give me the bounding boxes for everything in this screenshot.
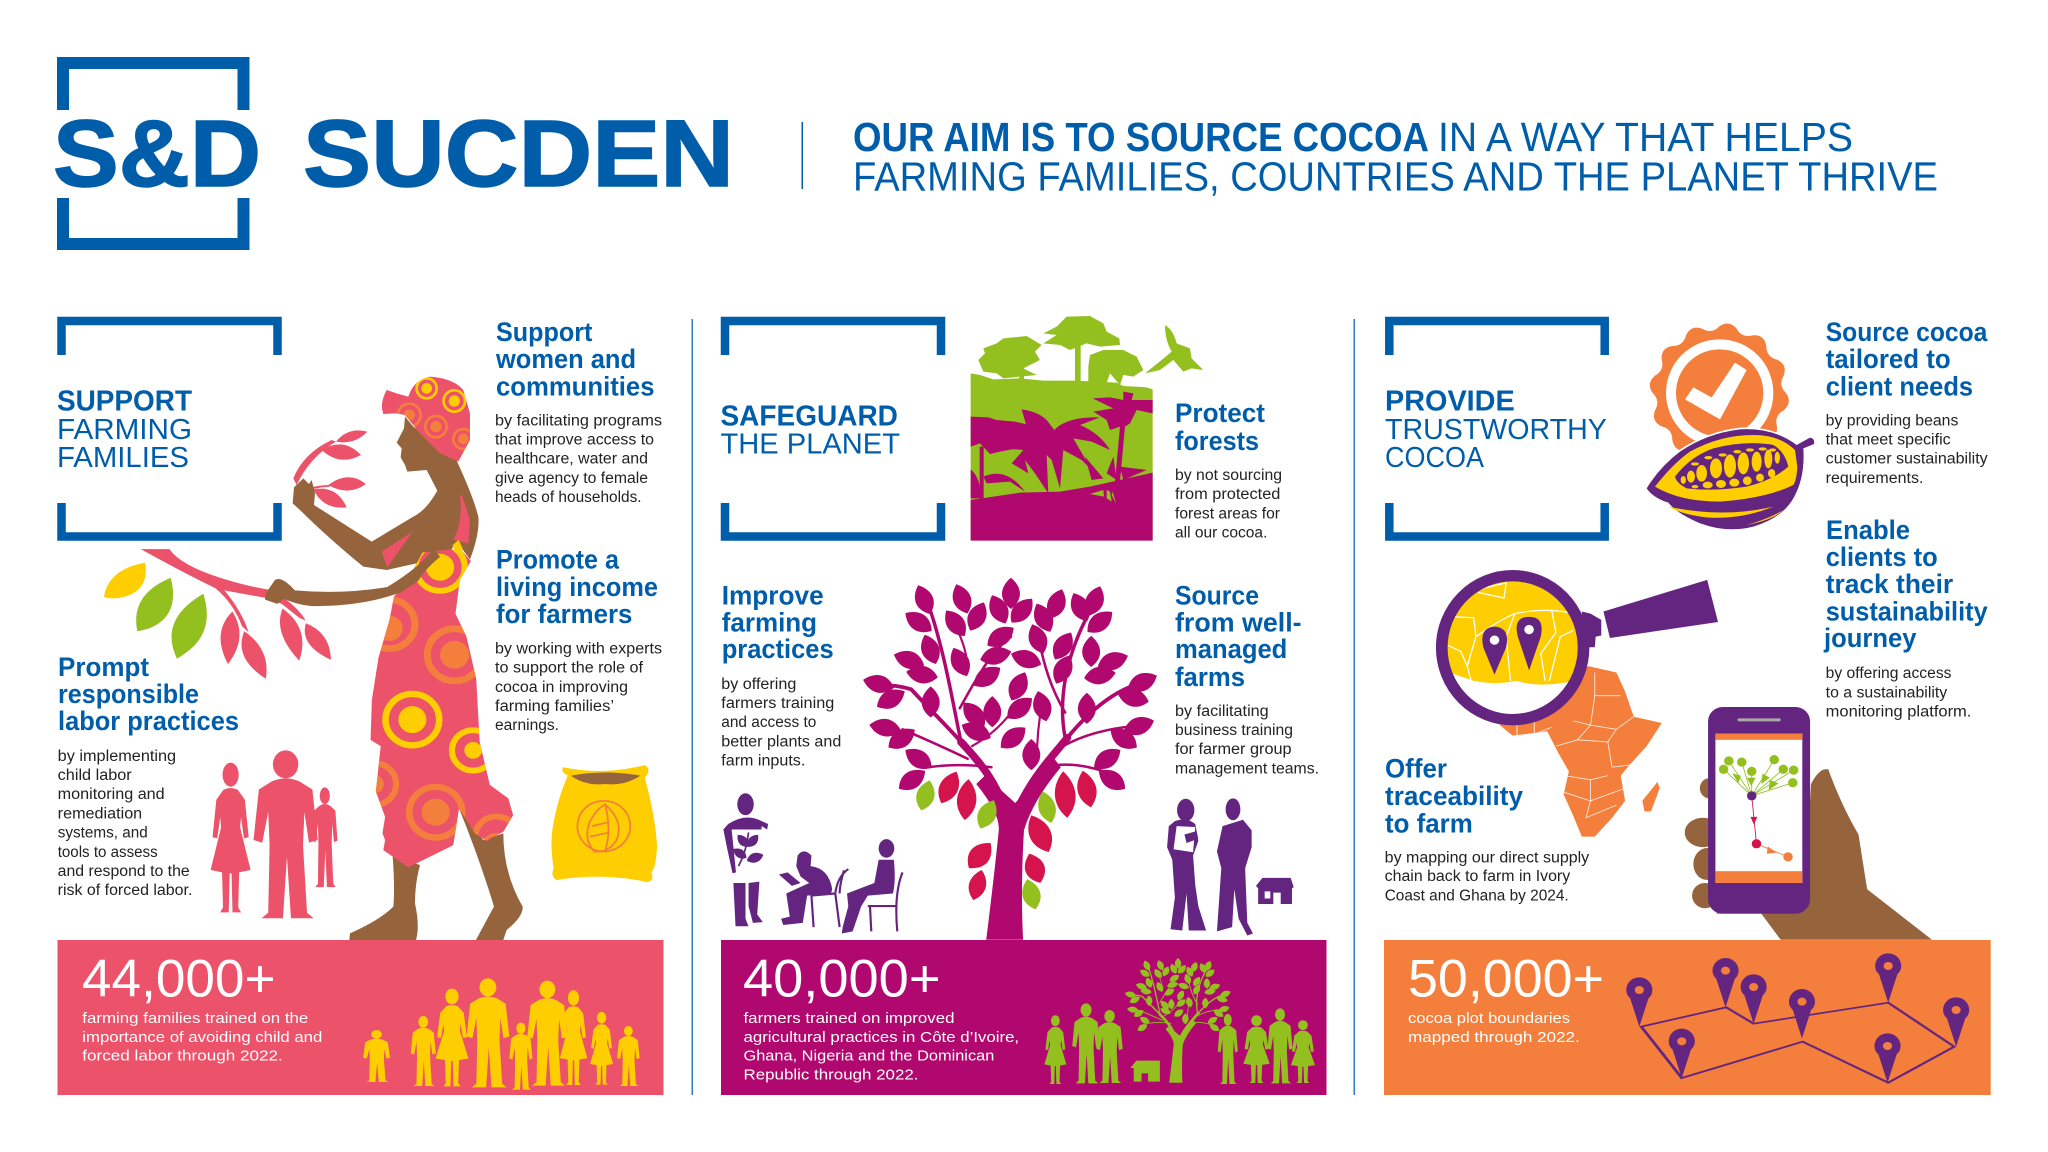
stat description: Republic through 2022. bbox=[744, 1067, 918, 1084]
front arm bbox=[265, 548, 440, 606]
text: prompt responsible labor practices: responsible bbox=[58, 679, 199, 709]
map of Africa bbox=[1500, 666, 1662, 837]
stat number: 40,000+ bbox=[743, 950, 940, 1009]
headwrap bbox=[382, 377, 473, 462]
panel: safeguard the planet bbox=[720, 316, 1326, 1095]
text: offer traceability to farm: traceability bbox=[1385, 781, 1523, 811]
header: S&D Sucden logo bbox=[53, 63, 734, 244]
text: source from well-managed farms: by facilitating bbox=[1175, 703, 1269, 720]
red and green fruit leaves bbox=[933, 768, 1100, 902]
stat description bbox=[744, 1010, 1019, 1084]
text: source cocoa tailored to client needs: by providing beans bbox=[1826, 412, 1959, 429]
section title: FAMILIES bbox=[57, 442, 189, 474]
seated farmer reading bbox=[779, 851, 848, 927]
text: source cocoa tailored to client needs bbox=[1826, 317, 1988, 487]
head, torso and raised arm bbox=[293, 417, 479, 570]
stat description: agricultural practices in Côte d’Ivoire, bbox=[744, 1029, 1019, 1046]
branch with leaves bbox=[104, 549, 331, 679]
section title: SAFEGUARD bbox=[720, 400, 898, 432]
text: promote a living income: by working with experts bbox=[495, 640, 662, 658]
text: prompt responsible labor practices: risk of forced labor. bbox=[58, 882, 192, 899]
phone bbox=[1708, 707, 1810, 914]
stat number: 44,000+ bbox=[82, 950, 276, 1009]
stat number: 50,000+ bbox=[1408, 950, 1604, 1009]
text: source from well-managed farms: Source bbox=[1175, 581, 1259, 611]
section title bbox=[1385, 386, 1607, 474]
text: source cocoa tailored to client needs: that meet specific bbox=[1826, 431, 1951, 448]
small branch in raised hand bbox=[293, 430, 367, 508]
section title: SUPPORT bbox=[57, 386, 192, 418]
farmer holding plant bbox=[723, 793, 768, 926]
text: enable clients to track their sustainability journey: Enable bbox=[1826, 515, 1910, 545]
text: prompt responsible labor practices: Prompt bbox=[58, 652, 149, 682]
stat description: farmers trained on improved bbox=[744, 1010, 954, 1027]
text: promote a living income: for farmers bbox=[496, 599, 632, 629]
text: promote a living income: Promote a bbox=[496, 544, 619, 574]
text: prompt responsible labor practices: and respond to the bbox=[58, 863, 190, 880]
text: promote a living income bbox=[495, 544, 662, 734]
tagline: FARMING FAMILIES, COUNTRIES AND THE PLANET THRIVE bbox=[853, 154, 1938, 200]
header divider bbox=[802, 122, 803, 189]
standing woman with clipboard bbox=[1167, 799, 1206, 931]
icon: house bbox=[1256, 878, 1294, 904]
quality badge bbox=[1650, 323, 1789, 462]
logo wordmark S&D: S&D bbox=[53, 101, 261, 207]
text: improve farming practices: better plants and bbox=[721, 734, 841, 750]
text: improve farming practices: Improve bbox=[722, 581, 824, 611]
logo bracket bbox=[63, 63, 244, 244]
text: prompt responsible labor practices: by implementing bbox=[58, 748, 176, 765]
illustration: woman with branches bbox=[104, 377, 523, 940]
text: support women and communities bbox=[495, 317, 662, 506]
tagline bbox=[853, 114, 1938, 200]
text: offer traceability to farm: by mapping our direct supply bbox=[1385, 849, 1589, 866]
illustration: quality badge and cocoa pod bbox=[1647, 323, 1814, 529]
text: prompt responsible labor practices: child labor bbox=[58, 767, 132, 784]
stat band: 44,000+ bbox=[58, 940, 664, 1095]
text: source cocoa tailored to client needs: client needs bbox=[1826, 372, 1973, 402]
illustration: family silhouettes bbox=[211, 750, 337, 918]
text: source from well-managed farms: for farmer group bbox=[1175, 741, 1292, 758]
text: enable clients to track their sustainability journey: to a sustainability bbox=[1826, 684, 1947, 701]
section bracket bbox=[1389, 321, 1605, 536]
text: source cocoa tailored to client needs: requirements. bbox=[1826, 470, 1923, 487]
text: enable clients to track their sustainability journey: track their bbox=[1826, 569, 1953, 599]
text: enable clients to track their sustainability journey: sustainability bbox=[1826, 596, 1988, 626]
text: source from well-managed farms: business training bbox=[1175, 722, 1293, 739]
section title: THE PLANET bbox=[720, 429, 900, 461]
text: prompt responsible labor practices: systems, and bbox=[58, 824, 148, 842]
text: enable clients to track their sustainability journey: journey bbox=[1823, 623, 1917, 653]
text: improve farming practices bbox=[721, 581, 841, 770]
text: improve farming practices: farming bbox=[722, 608, 817, 638]
icon: mapped plot with pins bbox=[1626, 953, 1969, 1083]
magnifier lens bbox=[1442, 576, 1601, 720]
section title bbox=[720, 400, 900, 461]
standing man bbox=[1217, 798, 1253, 936]
text: support women and communities: that improve access to bbox=[495, 431, 654, 448]
section title bbox=[57, 386, 192, 474]
text: promote a living income: cocoa in improving bbox=[495, 679, 628, 696]
text: support women and communities: by facilitating programs bbox=[495, 412, 662, 429]
text: source cocoa tailored to client needs: tailored to bbox=[1826, 344, 1951, 374]
panel: support farming families bbox=[57, 317, 664, 1095]
text: source from well-managed farms: from well- bbox=[1175, 608, 1302, 638]
tagline: IN A WAY THAT HELPS bbox=[1438, 114, 1853, 160]
section title: FARMING bbox=[57, 414, 192, 446]
icon: green tree bbox=[1124, 958, 1232, 1083]
logo wordmark SUCDEN: SUCDEN bbox=[303, 101, 734, 207]
stat description: forced labor through 2022. bbox=[82, 1048, 283, 1065]
text: prompt responsible labor practices: labor practices bbox=[58, 706, 239, 736]
illustration: hand holding phone bbox=[1685, 707, 1932, 940]
illustration: Africa map with magnifier bbox=[1442, 576, 1718, 837]
icon: bird bbox=[1145, 325, 1203, 373]
text: source cocoa tailored to client needs: Source cocoa bbox=[1826, 317, 1988, 347]
illustration: farmers in training bbox=[723, 793, 903, 933]
section title: PROVIDE bbox=[1385, 386, 1515, 418]
icon: green community silhouettes bbox=[1044, 1003, 1315, 1084]
text: source from well-managed farms: farms bbox=[1175, 662, 1245, 692]
panel: provide trustworthy cocoa bbox=[1384, 317, 1991, 1095]
text: enable clients to track their sustainability journey: by offering access bbox=[1826, 665, 1952, 682]
location pins bbox=[1482, 617, 1542, 675]
text: improve farming practices: by offering bbox=[721, 676, 796, 693]
text: prompt responsible labor practices: remediation bbox=[58, 806, 142, 822]
traceability network on screen bbox=[1719, 755, 1798, 861]
stat description: Ghana, Nigeria and the Dominican bbox=[744, 1048, 994, 1065]
stat description: mapped through 2022. bbox=[1408, 1029, 1580, 1046]
text: prompt responsible labor practices: monitoring and bbox=[58, 786, 165, 803]
text: prompt responsible labor practices bbox=[58, 652, 239, 899]
text: support women and communities: heads of households. bbox=[495, 489, 642, 506]
section bracket bbox=[725, 321, 941, 536]
stat description: farming families trained on the bbox=[82, 1010, 308, 1027]
section title: TRUSTWORTHY bbox=[1385, 414, 1607, 446]
text: source from well-managed farms: managed bbox=[1175, 634, 1287, 664]
text: support women and communities: give agency to female bbox=[495, 470, 648, 487]
text: enable clients to track their sustainability journey: monitoring platform. bbox=[1826, 703, 1971, 720]
stat band: 50,000+ bbox=[1384, 940, 1991, 1095]
text: protect forests: from protected bbox=[1175, 486, 1280, 503]
text: protect forests: forests bbox=[1175, 426, 1259, 456]
text: support women and communities: Support bbox=[496, 317, 593, 347]
cocoa pod bbox=[1647, 429, 1814, 529]
section bracket bbox=[62, 321, 278, 536]
text: offer traceability to farm: Offer bbox=[1385, 754, 1447, 784]
text: improve farming practices: and access to bbox=[721, 714, 816, 731]
magnifier handle bbox=[1603, 580, 1718, 638]
column dividers bbox=[692, 319, 1355, 1095]
stat band: 40,000+ bbox=[721, 940, 1326, 1095]
text: source from well-managed farms: management teams. bbox=[1175, 760, 1319, 778]
text: promote a living income: living income bbox=[496, 572, 658, 602]
text: source cocoa tailored to client needs: customer sustainability bbox=[1826, 451, 1988, 468]
text: improve farming practices: farmers training bbox=[721, 695, 834, 712]
text: offer traceability to farm: to farm bbox=[1385, 808, 1473, 838]
stat description bbox=[1408, 1010, 1580, 1046]
text: offer traceability to farm: Coast and Ghana by 2024. bbox=[1385, 888, 1569, 905]
text: offer traceability to farm: chain back to farm in Ivory bbox=[1385, 868, 1570, 885]
illustration: forest bbox=[971, 316, 1203, 541]
text: promote a living income: to support the role of bbox=[495, 660, 644, 676]
illustration: cocoa sack bbox=[551, 765, 657, 882]
tagline: OUR AIM IS TO SOURCE COCOA bbox=[853, 114, 1429, 160]
section title: COCOA bbox=[1385, 442, 1485, 474]
text: improve farming practices: farm inputs. bbox=[721, 752, 805, 770]
text: protect forests: forest areas for bbox=[1175, 505, 1280, 522]
text: support women and communities: healthcare, water and bbox=[495, 451, 648, 468]
text: offer traceability to farm bbox=[1385, 754, 1589, 905]
text: prompt responsible labor practices: tools to assess bbox=[58, 844, 158, 861]
illustration: central tree bbox=[861, 578, 1161, 940]
stat description: importance of avoiding child and bbox=[82, 1029, 322, 1046]
dress bbox=[370, 540, 514, 868]
text: promote a living income: farming families’ bbox=[495, 698, 614, 715]
seated farmer bbox=[842, 839, 903, 933]
icon: yellow family silhouettes bbox=[363, 978, 640, 1090]
text: enable clients to track their sustainability journey: clients to bbox=[1826, 542, 1938, 572]
hand bbox=[1685, 769, 1932, 940]
stat description bbox=[82, 1010, 322, 1065]
text: support women and communities: communities bbox=[496, 372, 654, 402]
green backdrop and canopy bbox=[971, 316, 1153, 540]
text: support women and communities: women and bbox=[495, 344, 636, 374]
illustration: farm managers and house bbox=[1167, 798, 1294, 936]
magenta foliage bbox=[971, 392, 1153, 541]
text: protect forests: Protect bbox=[1175, 398, 1265, 428]
text: protect forests: by not sourcing bbox=[1175, 467, 1282, 484]
text: protect forests bbox=[1175, 398, 1282, 541]
stat description: cocoa plot boundaries bbox=[1408, 1010, 1570, 1027]
legs bbox=[349, 807, 523, 940]
text: source from well-managed farms bbox=[1175, 581, 1319, 778]
text: promote a living income: earnings. bbox=[495, 717, 559, 734]
text: enable clients to track their sustainability journey bbox=[1823, 515, 1988, 720]
text: protect forests: all our cocoa. bbox=[1175, 524, 1267, 541]
text: improve farming practices: practices bbox=[722, 634, 834, 664]
